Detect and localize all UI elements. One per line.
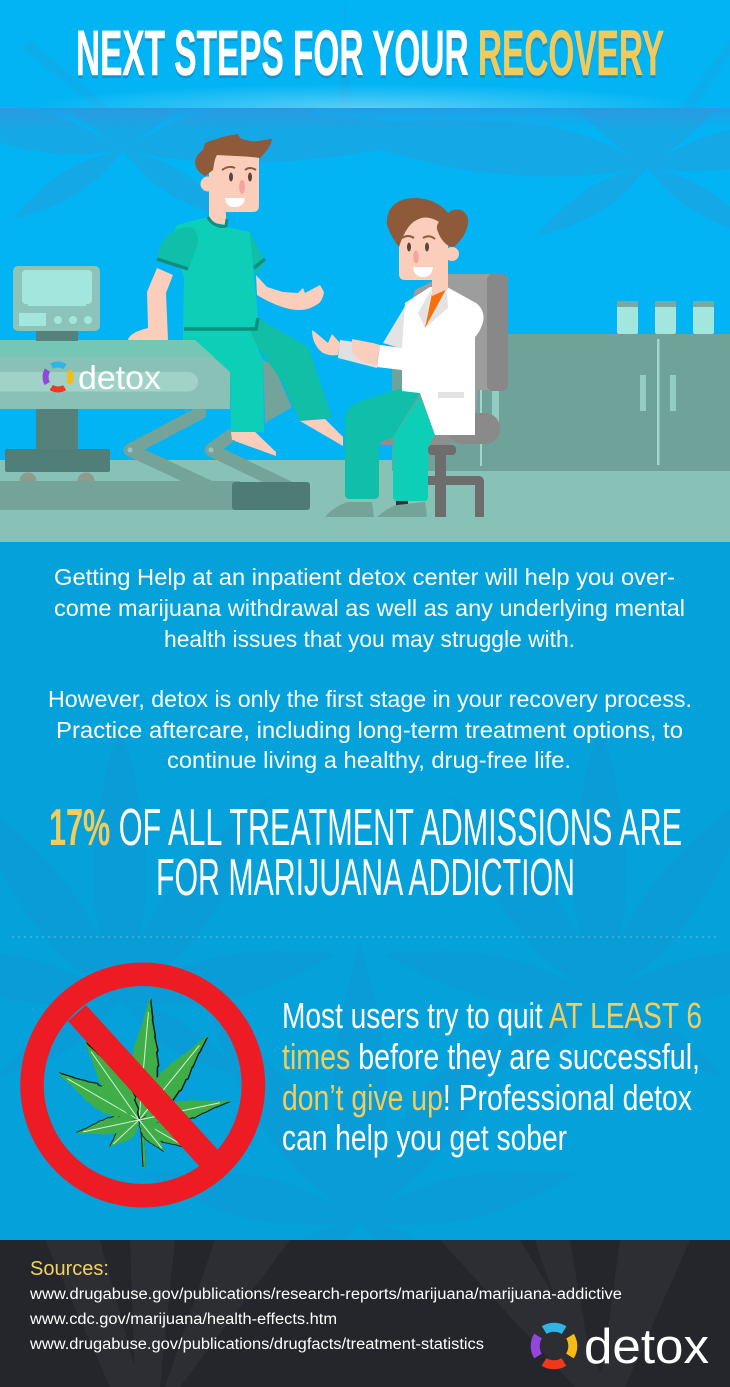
doctor head	[445, 247, 459, 261]
doctor legs	[345, 387, 420, 499]
character: patient upper body	[128, 134, 324, 340]
sources list: Sources:	[30, 1258, 109, 1280]
hospital bed	[0, 331, 310, 510]
intro text block: continue living a healthy, drug-free life.	[167, 747, 571, 773]
patient left arm	[128, 268, 173, 340]
character: doctor on chair	[312, 198, 508, 517]
sources list: www.drugabuse.gov/publications/research-reports/marijuana/marijuana-addictive	[29, 1286, 622, 1303]
intro text block: Practice aftercare, including long-term treatment options, to	[56, 717, 683, 743]
logo on bed	[46, 359, 162, 396]
character: patient legs	[183, 318, 343, 456]
intro text block: However, detox is only the first stage in your recovery process.	[48, 686, 692, 712]
statistic heading	[49, 799, 682, 907]
panel: illustrated header sky background	[0, 0, 730, 460]
intro text block: come marijuana withdrawal as well as any underlying mental	[54, 595, 685, 621]
office chair	[380, 274, 508, 517]
sources list	[29, 1258, 622, 1353]
intro text block	[48, 564, 692, 773]
intro text block: Getting Help at an inpatient detox center will help you over-	[54, 564, 675, 590]
panel: information section background	[0, 542, 730, 1308]
footer detox logo	[535, 1320, 709, 1374]
callout text: quit attempts: can help you get sober	[282, 1117, 567, 1158]
heart monitor	[13, 266, 100, 331]
panel: footer	[0, 1240, 730, 1387]
patient head	[200, 176, 216, 192]
logo on bed: detox	[78, 359, 162, 396]
cabinets and jars	[392, 301, 730, 471]
doctor coat	[383, 303, 418, 349]
callout text: quit attempts	[282, 995, 702, 1158]
floor	[0, 460, 730, 542]
patient right arm	[256, 275, 324, 310]
sources list: www.cdc.gov/marijuana/health-effects.htm	[29, 1311, 337, 1328]
patient shirt	[170, 217, 258, 330]
footer detox logo: detox	[584, 1320, 709, 1374]
intro text block: health issues that you may struggle with.	[164, 626, 575, 652]
bed wheels	[20, 472, 94, 490]
sources list: www.drugabuse.gov/publications/drugfacts/treatment-statistics	[29, 1336, 484, 1353]
icon: crossed-out cannabis leaf	[32, 974, 253, 1196]
doctor hands	[338, 340, 378, 368]
